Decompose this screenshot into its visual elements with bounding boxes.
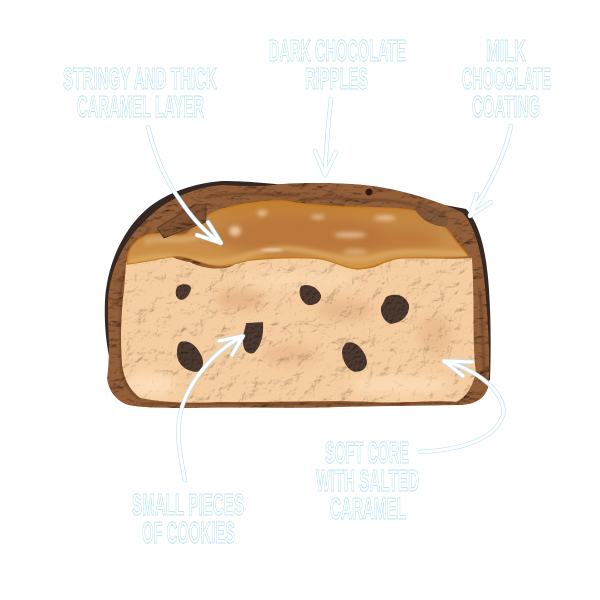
label: stringy and thick caramel layer: [63, 62, 217, 124]
cookie dough core: [121, 254, 476, 403]
cookie piece 5: [177, 341, 203, 372]
label: milk chocolate coating: [462, 34, 551, 124]
text: STRINGY AND THICK: [63, 62, 217, 96]
cookie piece 4: [243, 322, 263, 353]
label: soft core with salted caramel: CARAMEL: [330, 492, 406, 526]
label: stringy and thick caramel layer: CARAMEL LAYER: [77, 90, 204, 124]
dark chocolate back edge: [105, 181, 491, 396]
arrow: dark chocolate ripples: [315, 99, 336, 175]
cookie piece 2: [300, 285, 321, 305]
text: DARK CHOCOLATE: [269, 34, 406, 68]
coating creases: [120, 194, 484, 404]
text: WITH SALTED: [316, 464, 419, 498]
label: small pieces of cookies: OF COOKIES: [142, 516, 235, 550]
label: dark chocolate ripples: [269, 34, 406, 96]
arrow: milk chocolate coating: [470, 126, 511, 216]
cookie piece 1: [176, 284, 191, 300]
chocolate ripple fragment left: [157, 204, 206, 238]
dough shading: [124, 270, 451, 397]
cookie piece 6: [342, 342, 367, 372]
text: SMALL PIECES: [132, 488, 244, 522]
chocolate ripple fragment right: [412, 203, 449, 227]
caramel layer: [127, 201, 468, 269]
arrow: caramel layer: [148, 127, 221, 243]
label: soft core with salted caramel: SOFT CORE: [325, 436, 409, 470]
cookie piece 3: [381, 295, 409, 324]
arrow: soft core: [420, 361, 503, 452]
label: dark chocolate ripples: RIPPLES: [305, 62, 368, 96]
label: small pieces of cookies: [132, 488, 244, 550]
small dark spot on coating: [366, 188, 372, 196]
milk chocolate coating: [107, 183, 489, 408]
arrow: small pieces of cookies: [178, 336, 243, 480]
cross-section of the bar: [105, 181, 491, 408]
label: milk chocolate coating: MILK: [486, 34, 526, 68]
label: soft core with salted caramel: [316, 436, 419, 526]
